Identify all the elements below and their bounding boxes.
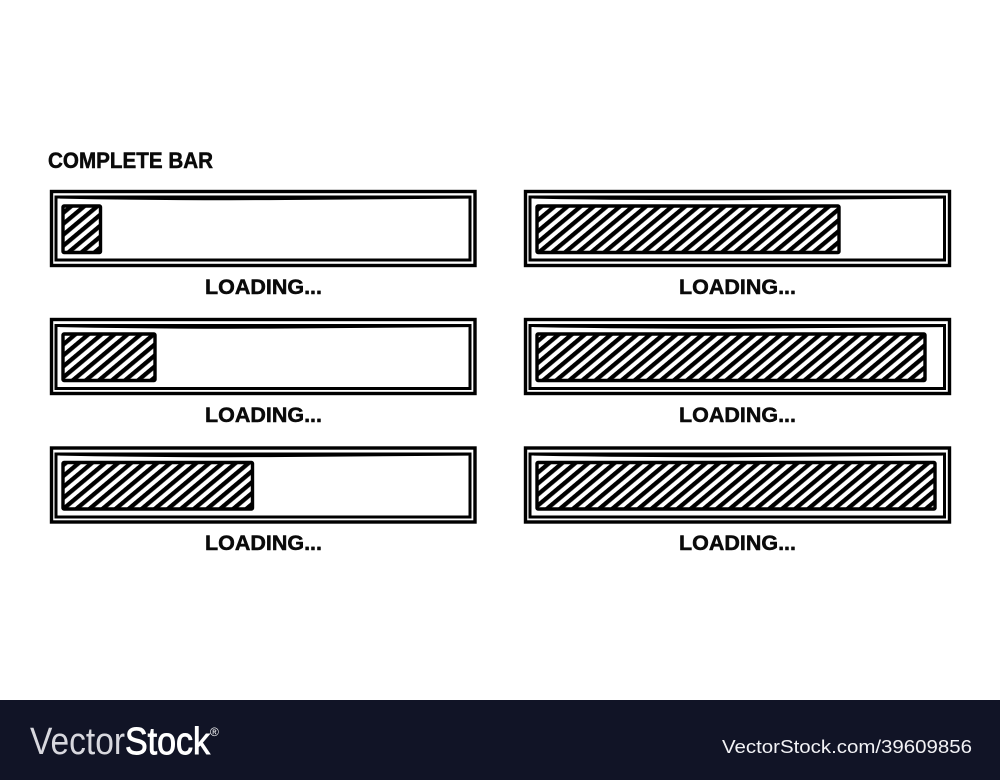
- progress bar 3: [52, 448, 475, 555]
- progress bar 3: LOADING...: [205, 532, 322, 555]
- progress bar 5: [526, 320, 950, 427]
- footer logo: Stock: [125, 721, 211, 763]
- progress bar 4: [526, 192, 950, 299]
- progress bar 1: LOADING...: [205, 276, 322, 299]
- progress bar 5: LOADING...: [679, 404, 796, 427]
- progress bar 6: LOADING...: [679, 532, 796, 555]
- progress bar 2: [52, 320, 475, 427]
- progress bar 1: [52, 192, 475, 299]
- footer image id: VectorStock.com/39609856: [722, 737, 972, 757]
- footer band: [0, 700, 1000, 780]
- footer logo: Vector: [30, 721, 125, 763]
- registered mark: ®: [210, 725, 219, 739]
- progress bar 4: LOADING...: [679, 276, 796, 299]
- footer logo: [30, 721, 211, 763]
- title: COMPLETE BAR: [48, 148, 213, 173]
- progress bar 6: [526, 448, 950, 555]
- progress bar 2: LOADING...: [205, 404, 322, 427]
